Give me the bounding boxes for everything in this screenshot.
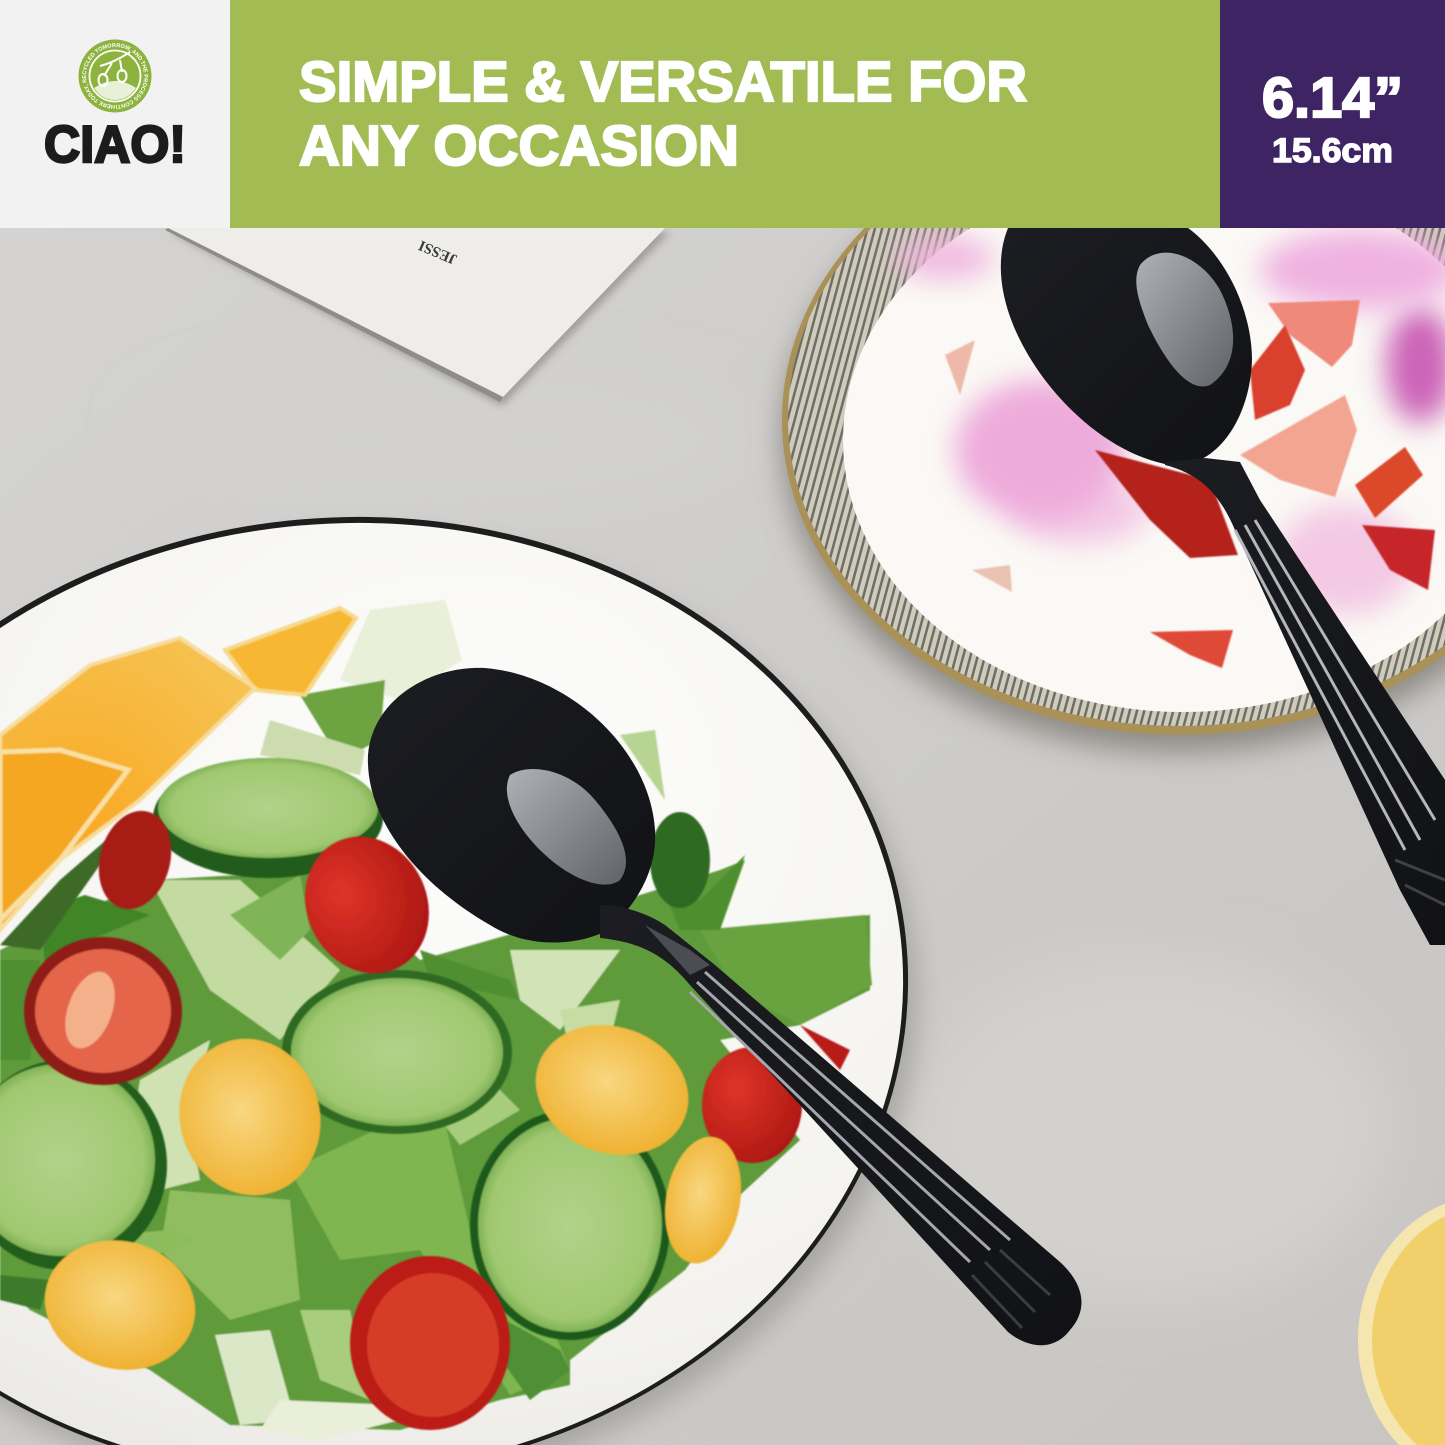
- photo: yogurt bowl: [782, 105, 1445, 753]
- header: size panel: [1220, 0, 1445, 228]
- photo: book corner: JESSI: [416, 237, 460, 267]
- photo: lemon: [1358, 1195, 1445, 1445]
- header: logo panel: [0, 0, 230, 228]
- photo: book corner: [165, 228, 670, 406]
- spoon: yogurt bowl: [1001, 228, 1445, 945]
- cucumbers: [0, 758, 710, 1340]
- logo wordmark: CIAO!: [44, 116, 186, 174]
- lettuce base: [0, 600, 872, 1440]
- header: title banner: [230, 0, 1220, 228]
- yellow tomatoes: [30, 1004, 751, 1386]
- spoon: salad plate: [368, 668, 1081, 1345]
- title line 2: ANY OCCASION: [299, 114, 739, 178]
- photo: salad plate: [0, 461, 964, 1445]
- size in inches: 6.14”: [1262, 66, 1403, 130]
- red tomatoes: [24, 803, 850, 1430]
- size in centimetres: 15.6cm: [1272, 132, 1393, 170]
- icon: logo badge: [78, 40, 152, 112]
- strawberries: [945, 300, 1435, 668]
- oranges: [0, 608, 356, 950]
- title line 1: SIMPLE & VERSATILE FOR: [299, 50, 1027, 114]
